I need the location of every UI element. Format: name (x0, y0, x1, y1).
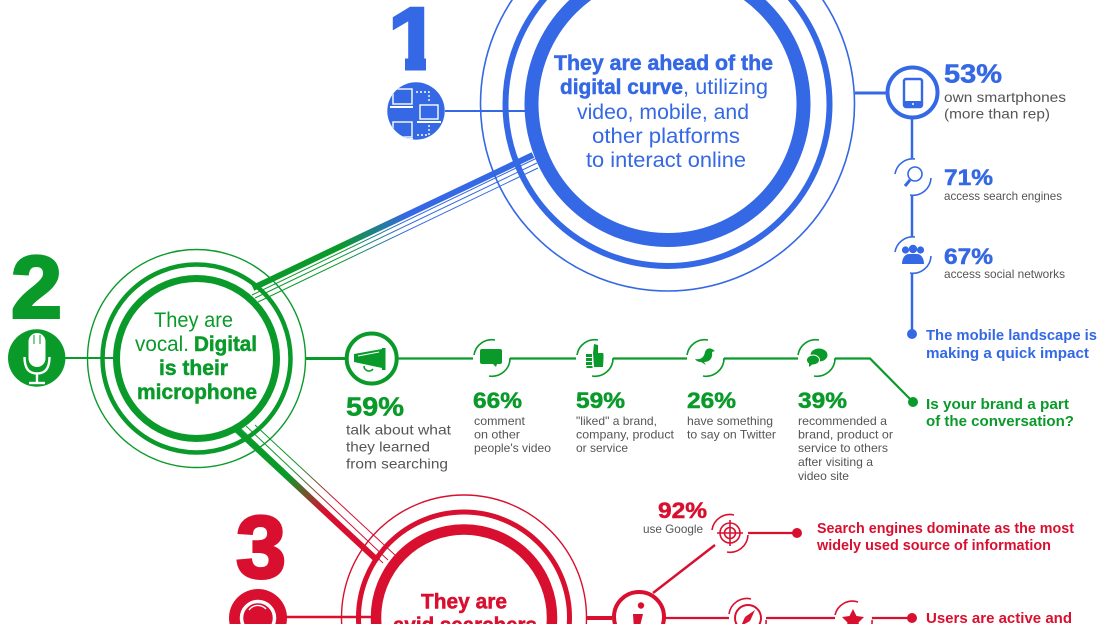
heading: circle 3 text (393, 590, 537, 624)
callout: conversation (926, 397, 1074, 430)
icon: megaphone (347, 334, 397, 384)
stat: 53% smartphones: 53% (944, 58, 1002, 88)
heading: circle 2 text (135, 309, 257, 404)
stat: 59% talk: they learned (346, 438, 430, 454)
heading: circle 2 text: Digital (194, 333, 257, 356)
stat: 71% search: access search engines (944, 189, 1062, 203)
stat: 53% smartphones: (more than rep) (944, 106, 1050, 122)
icon: search button (229, 589, 371, 624)
icon: star (835, 601, 872, 624)
icon: chat bubbles (798, 340, 835, 376)
callout: search engines dominate: Search engines dominate as the most (817, 521, 1074, 537)
callout: mobile landscape: The mobile landscape is (926, 328, 1097, 344)
stat: 71% search: 71% (944, 165, 993, 190)
callout: mobile landscape (926, 328, 1097, 362)
heading: circle 1 text (554, 52, 773, 172)
stat: 26% twitter: have something (687, 414, 773, 428)
stat: 39% recommended: service to others (798, 441, 888, 455)
stat: 39% recommended: 39% (798, 388, 847, 413)
stat: 92% google: 92% (658, 498, 707, 523)
stat: 66% comment: people's video (474, 441, 551, 455)
stat: 66% comment: on other (474, 428, 520, 442)
stat: 59% liked: company, product (576, 428, 675, 442)
callout: conversation: Is your brand a part (926, 397, 1069, 413)
stat: 39% recommended (798, 388, 893, 483)
stat: 39% recommended: after visiting a (798, 455, 873, 469)
callout: search engines dominate: widely used source of information (816, 538, 1051, 554)
icon: compass (729, 599, 766, 624)
heading: circle 1 text: , utilizing (683, 76, 768, 99)
stat: 67% social (944, 244, 1065, 281)
connector: circle 1 to circle 2 (252, 155, 538, 302)
heading: circle 2 text: is their (159, 357, 228, 380)
heading: circle 2 text: vocal. (135, 333, 189, 356)
number 2: 2 (11, 238, 62, 336)
timeline: green horizontal (306, 358, 918, 407)
stat: 71% search (944, 165, 1062, 203)
heading: circle 1 text: other platforms (592, 125, 740, 148)
stat: 59% talk (346, 392, 451, 472)
stat: 26% twitter: to say on Twitter (687, 428, 776, 442)
stat: 66% comment: comment (474, 414, 526, 428)
timeline: blue vertical (907, 118, 917, 339)
stat: 66% comment (473, 388, 551, 455)
heading: circle 1 text: digital curve (560, 76, 683, 99)
icon: social (895, 237, 931, 273)
heading: circle 2 text: They are (154, 309, 233, 332)
stat: 59% liked: or service (576, 441, 628, 455)
icon: target (712, 515, 748, 552)
stat: 53% smartphones: own smartphones (944, 89, 1066, 105)
heading: circle 1 text: to interact online (586, 149, 746, 172)
stat: 66% comment: 66% (473, 388, 522, 413)
timeline: target branch (748, 528, 802, 538)
stat: 59% talk: talk about what (346, 422, 451, 438)
panel: circle 3 rings (342, 495, 586, 624)
panel: circle 2 rings (88, 250, 306, 468)
stat: 39% recommended: recommended a (798, 414, 887, 428)
stat: 39% recommended: brand, product or (798, 428, 893, 442)
stat: 59% liked: "liked" a brand, (576, 414, 657, 428)
callout: conversation: of the conversation? (926, 414, 1074, 430)
callout: mobile landscape: making a quick impact (926, 346, 1089, 362)
heading: circle 2 text: microphone (137, 381, 257, 404)
icon: microphone (8, 329, 114, 387)
stat: 92% google (643, 498, 707, 536)
timeline: red horizontal (665, 613, 917, 623)
icon: search (895, 159, 931, 195)
callout: search engines dominate (816, 521, 1074, 554)
stat: 26% twitter: 26% (687, 388, 736, 413)
stat: 59% talk: from searching (346, 456, 448, 472)
heading: circle 1 text: They are ahead of the (554, 52, 773, 75)
stat: 53% smartphones (944, 58, 1066, 122)
connector: circle 2 to circle 3 (237, 425, 395, 563)
stat: 59% liked: 59% (576, 388, 625, 413)
stat: 67% social: access social networks (944, 267, 1065, 281)
icon: smartphone (888, 68, 938, 118)
number 3: 3 (236, 498, 286, 596)
icon: network (387, 82, 525, 140)
icon: comment (474, 340, 510, 376)
heading: circle 3 text: They are (421, 590, 507, 614)
icon: thumbs up (577, 340, 613, 376)
stat: 92% google: use Google (643, 522, 703, 536)
stat: 26% twitter (687, 388, 776, 442)
stat: 59% liked (576, 388, 675, 455)
stat: 59% talk: 59% (346, 392, 404, 422)
panel: circle 1 rings (480, 0, 854, 291)
stat: 39% recommended: video site (798, 469, 849, 483)
icon: info (586, 545, 715, 624)
stat: 67% social: 67% (944, 244, 993, 269)
connector: circle 1 to smartphone (855, 92, 887, 94)
heading: circle 1 text: video, mobile, and (577, 101, 749, 124)
icon: twitter bird (687, 340, 724, 376)
